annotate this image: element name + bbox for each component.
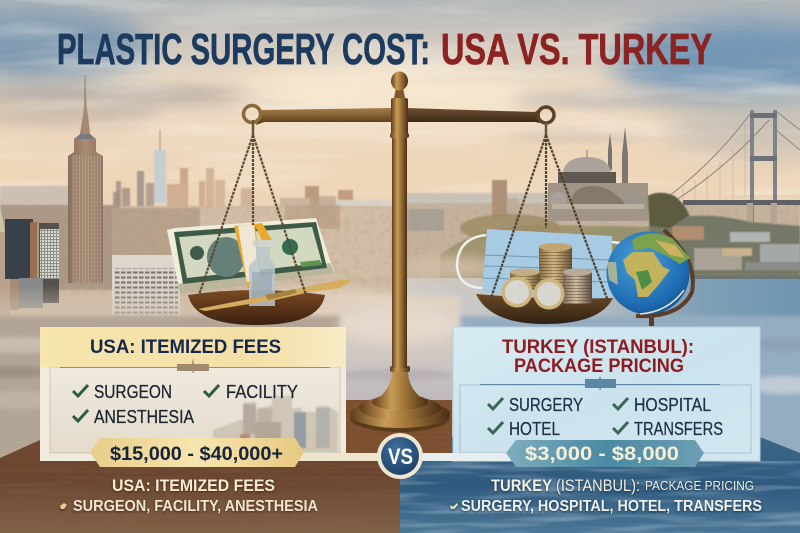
- checklist: Turkey package: TRANSFERS: [634, 419, 723, 439]
- panel: Turkey package pricing: [453, 327, 760, 461]
- checklist: USA fees: ANESTHESIA: [94, 407, 194, 427]
- panel header band: [40, 327, 346, 367]
- side fog left: [0, 316, 345, 466]
- scale base: [350, 366, 450, 432]
- heading: Turkey: PACKAGE PRICING: [514, 356, 684, 377]
- price pill: USA: [90, 438, 304, 467]
- icon: white office building: [112, 255, 180, 325]
- VS badge: VS: [388, 444, 413, 469]
- side fog right: [455, 316, 800, 466]
- scale left beam: [244, 106, 392, 125]
- scale right beam: [407, 107, 554, 123]
- title: PLASTIC SURGERY COST:: [57, 25, 430, 74]
- scalpel: [198, 280, 352, 311]
- checklist: USA fees: [73, 382, 298, 427]
- footer text: USA: SURGEON, FACILITY, ANESTHESIA: [73, 498, 318, 515]
- footer text: Turkey: [450, 477, 762, 515]
- divider ornament: [60, 358, 330, 373]
- shore buildings: [672, 226, 800, 270]
- pan bowl right: [476, 294, 613, 324]
- checklist: Turkey package: HOTEL: [509, 419, 560, 439]
- divider ornament: [480, 376, 720, 390]
- footer text: Turkey: PACKAGE PRICING: [645, 478, 754, 493]
- connector band: [300, 453, 510, 461]
- checklist: Turkey package: SURGERY: [509, 395, 583, 415]
- VS badge: [377, 433, 423, 479]
- bullet: [450, 503, 458, 509]
- panel: USA itemized fees: [40, 327, 346, 461]
- right pan: mask, coins, globe: [457, 123, 693, 326]
- surgical mask: [457, 229, 620, 300]
- footer text: Turkey: TURKEY: [491, 477, 552, 495]
- coin stacks: [502, 243, 592, 310]
- checklist: Turkey package: HOSPITAL: [634, 395, 711, 415]
- price pill: Turkey: $3,000 - $8,000: [525, 443, 679, 465]
- right chains: [490, 123, 608, 301]
- footer text: USA: USA: ITEMIZED FEES: [112, 477, 275, 495]
- table: wood and blue halves: [0, 400, 800, 533]
- checklist: USA fees: SURGEON: [94, 382, 172, 402]
- cash stack: [167, 218, 334, 294]
- pan bowl left: [188, 290, 325, 325]
- inner frame: [460, 385, 751, 453]
- icon: empire state building: [68, 75, 103, 283]
- checklist: Turkey package: [488, 395, 723, 439]
- price pill: USA: $15,000 - $40,000+: [110, 443, 283, 465]
- heading: Turkey: [502, 337, 694, 377]
- left chains: [198, 120, 307, 298]
- checklist: USA fees: FACILITY: [226, 382, 298, 402]
- icon: blue mosque: [548, 127, 648, 221]
- scale center hub and finial: [390, 72, 409, 138]
- left city: haze skyline: [0, 75, 410, 333]
- right city: Istanbul shore: [400, 110, 800, 335]
- heading: USA: USA: ITEMIZED FEES: [90, 337, 281, 358]
- faded city inside panel: [213, 396, 338, 452]
- heading: Turkey: TURKEY (ISTANBUL):: [502, 337, 694, 358]
- left pan: money, vial, scalpel: [167, 120, 352, 325]
- balance scale: post and beam: [244, 72, 554, 432]
- bullet: [60, 503, 67, 509]
- glass vial: [249, 240, 275, 306]
- icon: bosphorus bridge: [668, 110, 800, 223]
- scale post: [392, 130, 407, 368]
- footer text: Turkey: (ISTANBUL):: [556, 477, 640, 495]
- price pill: Turkey: [506, 440, 704, 467]
- icon: globe: [606, 230, 693, 326]
- title: USA VS. TURKEY: [441, 25, 712, 74]
- footer text: Turkey: SURGERY, HOSPITAL, HOTEL, TRANSFERS: [461, 498, 762, 515]
- footer text: USA: [60, 477, 318, 515]
- green hillside: [648, 193, 800, 275]
- trees beside the mosque: [648, 193, 688, 228]
- icon: dark foreground towers: [0, 205, 59, 320]
- center haze behind the post: [335, 296, 460, 406]
